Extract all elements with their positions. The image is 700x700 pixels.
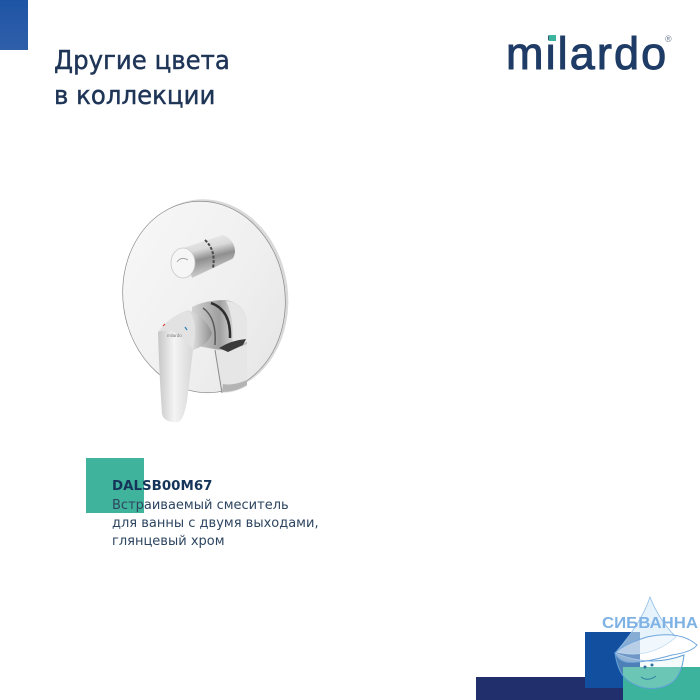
heading: в коллекции bbox=[54, 81, 215, 111]
mixer body bbox=[192, 300, 247, 352]
watermark: Сибванна bbox=[602, 596, 698, 689]
caption teal square bbox=[86, 458, 144, 513]
heading: Другие цвета bbox=[54, 46, 230, 76]
product description: Встраиваемый смеситель bbox=[112, 498, 289, 513]
watermark name: СИБВАННА bbox=[602, 615, 698, 632]
logo registered mark: ® bbox=[665, 34, 672, 44]
corner accent: blue block bbox=[0, 0, 28, 50]
product description: глянцевый хром bbox=[112, 534, 225, 549]
cold mark bbox=[185, 327, 187, 330]
heading bbox=[54, 46, 230, 111]
product code: DALSB00M67 bbox=[112, 479, 212, 494]
diverter knob bbox=[171, 235, 235, 278]
product description bbox=[112, 498, 319, 549]
product caption bbox=[112, 479, 319, 549]
bottom corner: teal block bbox=[623, 667, 700, 700]
lever handle bbox=[158, 310, 212, 422]
watermark drop bbox=[616, 597, 676, 654]
plate bbox=[110, 191, 298, 403]
plate rim bbox=[113, 189, 301, 403]
bottom corner: blue block bbox=[585, 632, 640, 688]
bottom corner: navy bar bbox=[476, 677, 626, 700]
brand mark on lever: milardo bbox=[167, 333, 182, 338]
logo wordmark: milardo: milardo bbox=[506, 28, 668, 79]
logo teal dot bbox=[549, 35, 556, 41]
spout bbox=[214, 336, 247, 393]
hot mark bbox=[163, 324, 165, 326]
watermark tub bbox=[615, 635, 697, 689]
product description: для ванны с двумя выходами, bbox=[112, 516, 319, 531]
